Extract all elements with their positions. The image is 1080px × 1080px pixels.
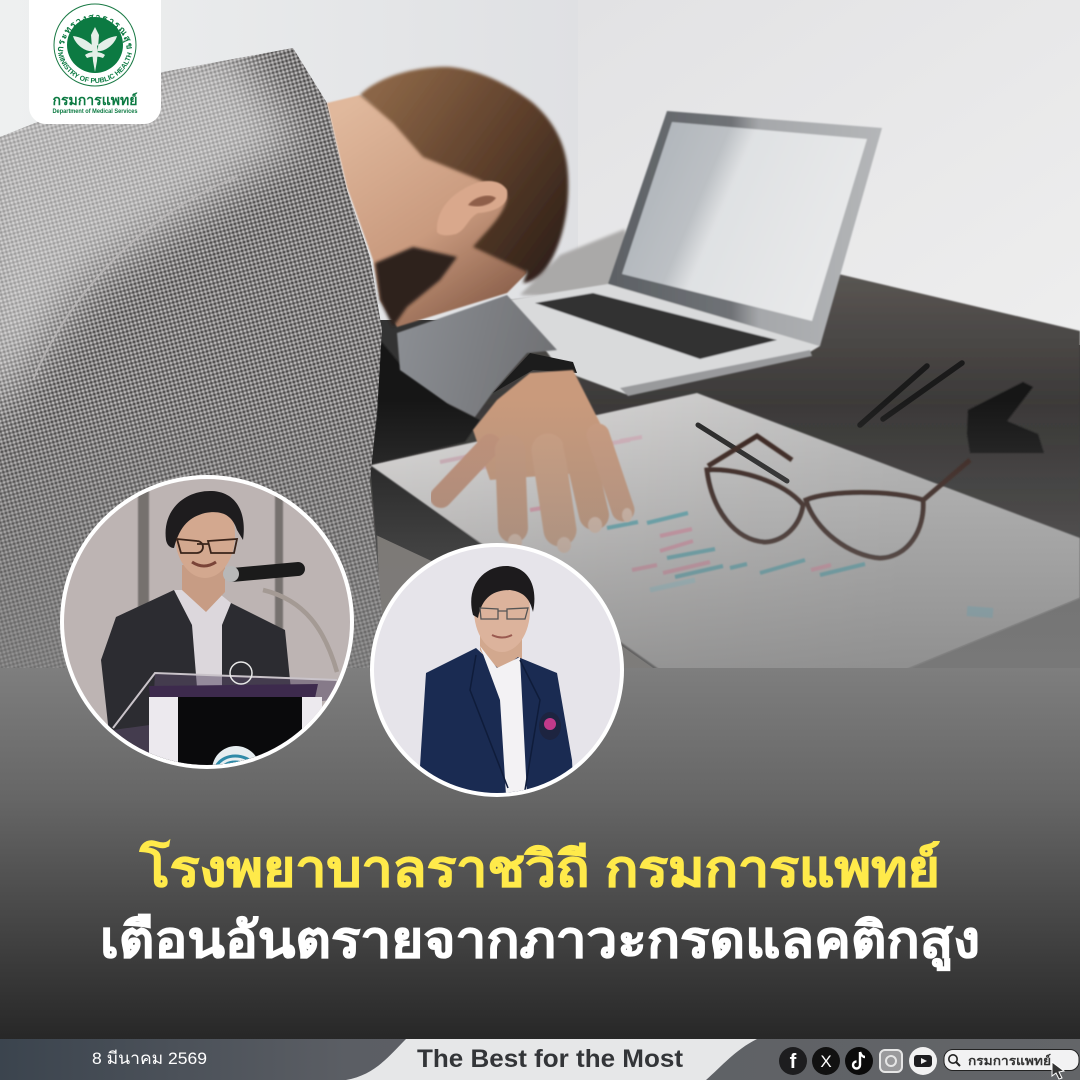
search glass ring <box>949 1055 957 1063</box>
shoulder seam <box>33 177 237 380</box>
hand <box>441 370 632 553</box>
icon: facebook: f <box>790 1051 797 1073</box>
floor below desk <box>377 530 670 680</box>
stapler <box>967 382 1044 453</box>
mouth <box>492 635 512 638</box>
background photo: man asleep at desk <box>0 0 1080 680</box>
middle finger <box>548 450 560 530</box>
footer bar <box>0 1039 1080 1080</box>
laptop front edge <box>620 350 812 396</box>
emblem disc <box>67 17 123 73</box>
title line 2: เตือนอันตรายจากภาวะกรดแลคติกสูง <box>100 912 980 971</box>
icon: X <box>812 1047 840 1075</box>
arm shadow under sleeve <box>370 340 480 465</box>
emblem <box>54 4 136 86</box>
portrait scene <box>370 543 624 800</box>
footer swoosh <box>346 1039 757 1080</box>
curtain stripes <box>137 491 284 629</box>
slogan: The Best for the Most <box>417 1045 684 1073</box>
temples <box>708 436 970 502</box>
sleeve on desk <box>397 295 557 417</box>
department name english: Department of Medical Services <box>52 109 138 115</box>
search pill <box>944 1050 1079 1079</box>
portrait border <box>370 543 624 797</box>
glasses <box>707 436 970 558</box>
portrait border <box>60 475 354 769</box>
podium white front <box>149 697 322 770</box>
search glass <box>956 1062 960 1066</box>
shelf behind laptop <box>520 229 640 300</box>
mouth <box>192 562 216 566</box>
inner ear <box>468 196 496 206</box>
plain background <box>374 547 620 768</box>
laptop <box>508 111 882 396</box>
icon: tiktok <box>845 1047 873 1075</box>
department name thai: กรมการแพทย์ <box>52 92 138 108</box>
neck <box>480 636 522 668</box>
suit <box>101 590 300 770</box>
shirted torso <box>0 48 388 680</box>
badge centre <box>544 718 556 730</box>
chart marks on document <box>440 437 993 613</box>
face <box>474 590 530 652</box>
ring text bottom: MINISTRY OF PUBLIC HEALTH <box>58 52 132 83</box>
face <box>176 512 235 578</box>
podium logo mark <box>216 754 250 765</box>
lapel line <box>470 655 540 790</box>
podium logo <box>212 746 256 765</box>
podium black panel <box>178 697 302 772</box>
torso highlight <box>0 40 300 430</box>
portrait: doctor in navy jacket <box>370 543 624 800</box>
icon: instagram <box>880 1050 902 1072</box>
glasses <box>177 539 237 553</box>
cursor <box>1052 1062 1064 1079</box>
portrait: doctor at podium <box>60 475 354 794</box>
emblem ring <box>54 4 136 86</box>
card background <box>29 0 161 124</box>
microphone grille <box>223 566 239 582</box>
microphone <box>225 562 305 582</box>
little finger <box>598 435 623 510</box>
jacket <box>418 648 574 800</box>
fingernails <box>508 508 632 553</box>
neck and face <box>327 95 527 327</box>
ear <box>437 181 507 235</box>
lower desk front <box>900 598 1080 672</box>
document on desk <box>370 393 1080 672</box>
podium purple trim <box>149 684 318 698</box>
hair <box>166 491 244 548</box>
hair <box>360 67 568 283</box>
bottom fade of photo <box>0 400 1080 670</box>
icon: facebook <box>779 1047 807 1075</box>
ring finger <box>578 445 594 515</box>
back of hand <box>473 370 618 480</box>
icon: youtube <box>909 1047 937 1075</box>
desk dark edge <box>370 463 485 565</box>
hair <box>471 566 534 618</box>
neck <box>182 565 225 612</box>
search term: กรมการแพทย์ <box>968 1053 1051 1068</box>
title line 1: โรงพยาบาลราชวิถี กรมการแพทย์ <box>139 839 940 897</box>
microphone stand <box>263 590 337 672</box>
jacket badge <box>539 712 561 740</box>
portrait scene <box>64 479 350 765</box>
icon: X: X <box>820 1052 832 1071</box>
pen on document <box>698 425 787 481</box>
logo card <box>29 0 161 124</box>
ring text top: กระทรวงสาธารณสุข <box>58 14 132 52</box>
glasses <box>480 608 528 619</box>
podium glass edge <box>113 673 337 728</box>
right wall <box>578 0 1080 345</box>
date: 8 มีนาคม 2569 <box>92 1049 207 1068</box>
laptop screen <box>622 122 867 321</box>
laptop base <box>508 284 820 395</box>
gradient band behind title <box>0 668 1080 1040</box>
shirt <box>480 646 527 795</box>
beard <box>375 247 457 327</box>
keyboard <box>535 293 777 359</box>
left wall <box>0 0 580 320</box>
right lens <box>806 492 923 558</box>
curtain background <box>60 476 354 770</box>
title <box>100 839 980 971</box>
shirt <box>174 590 231 686</box>
watch <box>493 353 577 393</box>
podium glass <box>114 674 336 754</box>
index finger <box>510 450 513 528</box>
caduceus <box>73 27 117 72</box>
footer background <box>0 1039 1080 1080</box>
laptop screen frame <box>608 111 882 346</box>
pens <box>860 363 962 425</box>
jacket emblem <box>230 662 252 684</box>
thumb <box>441 445 490 497</box>
left lens <box>707 470 803 542</box>
desk <box>370 265 1080 680</box>
